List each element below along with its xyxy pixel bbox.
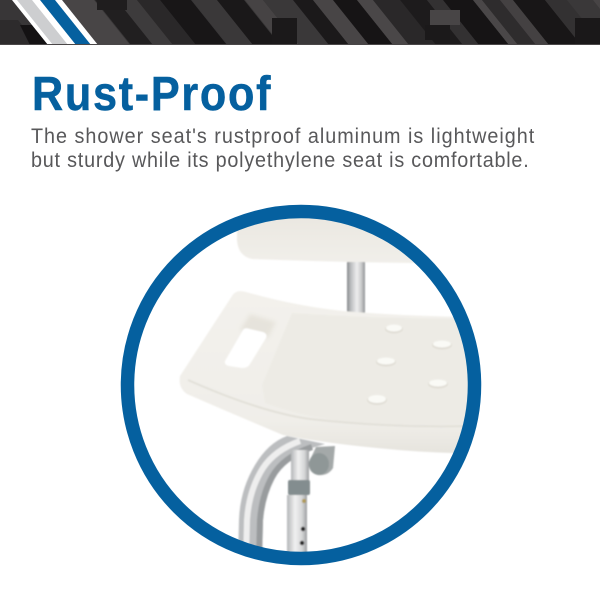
circular photo: shower chair seat (128, 210, 480, 560)
handle hole (225, 328, 267, 368)
leg arch (238, 436, 325, 560)
description text: but sturdy while its polyethylene seat is comfortable. (31, 148, 529, 172)
header banner (0, 0, 600, 45)
description text (31, 124, 534, 172)
title: Rust-Proof (32, 67, 271, 121)
accent stripes (12, 0, 98, 45)
adjustable leg post (287, 450, 310, 555)
grey cap (309, 446, 335, 475)
seat (180, 291, 480, 453)
seat drain holes (367, 324, 452, 405)
handle recess (242, 315, 274, 336)
backrest (236, 218, 414, 263)
blue ring (128, 212, 474, 558)
backrest support post (347, 262, 365, 314)
description text: The shower seat's rustproof aluminum is lightweight (31, 124, 534, 148)
